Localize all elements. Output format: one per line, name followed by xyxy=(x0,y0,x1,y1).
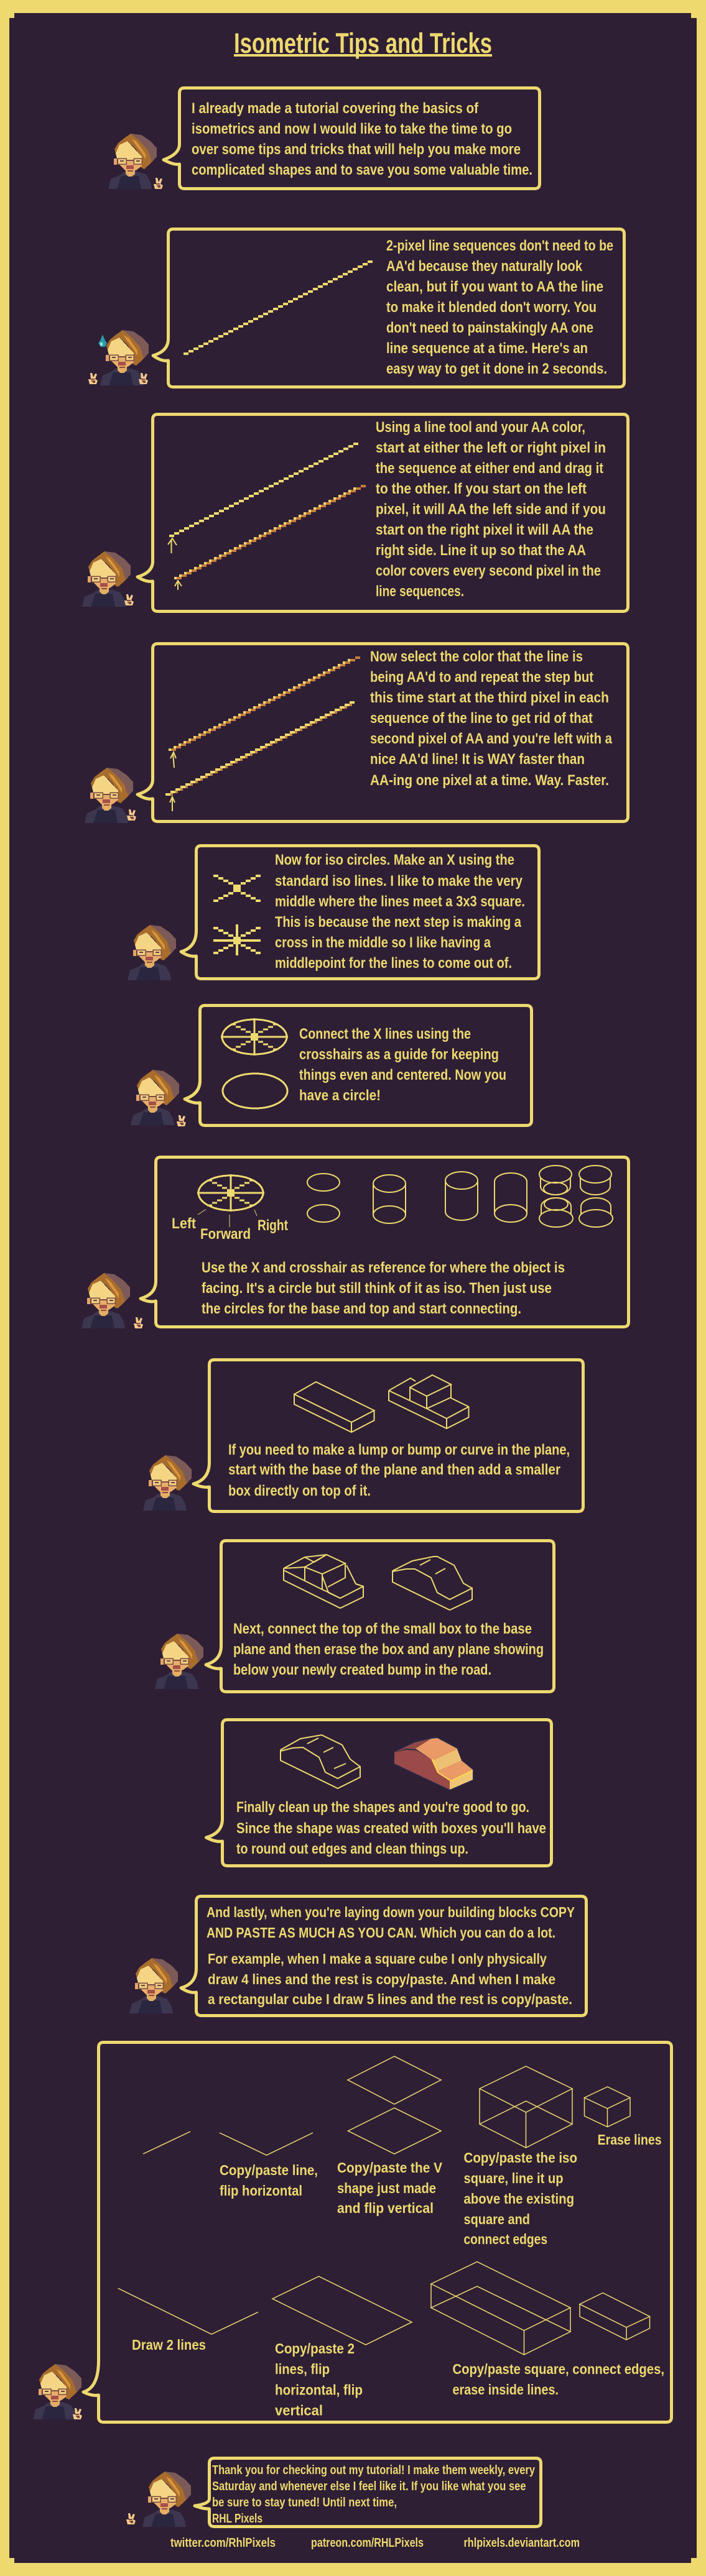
diagram: two diamonds with caption xyxy=(337,2056,443,2216)
panel: copy and paste xyxy=(129,1896,586,2015)
bump text xyxy=(228,1442,570,1499)
diagram: finished rectangular box xyxy=(580,2293,649,2340)
copy and paste text: And lastly, when you're laying down your building blocks COPY xyxy=(207,1904,575,1920)
diagram: parallelogram with caption: horizontal, flip xyxy=(275,2382,363,2398)
connect text xyxy=(299,1026,506,1104)
diagram: two long lines with caption: Draw 2 lines xyxy=(132,2337,206,2353)
thanks text: Saturday and whenever else I feel like it. If you like what you see xyxy=(212,2480,526,2493)
intro text: complicated shapes and to save you some valuable time. xyxy=(192,162,532,178)
AA instruction text xyxy=(376,419,606,600)
cylinders text: the circles for the base and top and start connecting. xyxy=(202,1300,521,1317)
clean up text: to round out edges and clean things up. xyxy=(236,1841,468,1857)
icon: short can with inner circle, top xyxy=(539,1166,572,1195)
panel: cube construction steps xyxy=(33,2043,672,2422)
iso circle text: middle where the lines meet a 3x3 square. xyxy=(275,893,525,910)
diagram: wire rectangular box with caption: erase inside lines. xyxy=(453,2381,559,2398)
line sequence text: to make it blended don't worry. You xyxy=(386,299,597,316)
icon: cylinder facing down xyxy=(495,1173,527,1222)
speech bubble: circle facing and cylinders xyxy=(141,1157,628,1327)
AA instruction text: to the other. If you start on the left xyxy=(376,481,587,497)
panel: closing thanks xyxy=(126,2458,541,2527)
title: Isometric Tips and Tricks xyxy=(234,27,492,59)
diagram: wire cube with caption: Copy/paste the iso xyxy=(464,2150,577,2166)
thanks text: be sure to stay tuned! Until next time, xyxy=(212,2496,397,2509)
icon: cylinder facing up xyxy=(445,1172,478,1220)
diagram: wire cube with caption: square and xyxy=(464,2211,530,2227)
speech bubble: clean up xyxy=(207,1719,551,1866)
intro text: over some tips and tricks that will help you make more xyxy=(192,141,521,158)
diagram: V shape with caption: Copy/paste line, xyxy=(220,2162,318,2178)
panel: introduction xyxy=(108,88,540,189)
footer links xyxy=(170,2536,580,2550)
connect text: Connect the X lines using the xyxy=(299,1026,471,1042)
speech bubble: connect the X lines xyxy=(185,1006,531,1125)
icon: shaded bump xyxy=(393,1737,474,1791)
connect text: have a circle! xyxy=(299,1087,381,1104)
diagram: finished small cube with caption xyxy=(585,2087,662,2148)
avatar: presenter with pointing hand xyxy=(33,2364,82,2419)
AA instruction text: the sequence at either end and drag it xyxy=(376,460,603,477)
line sequence text: line sequence at a time. Here's an xyxy=(386,340,588,357)
direction labels: Left xyxy=(172,1215,196,1232)
panel: connect small box to base xyxy=(155,1540,554,1692)
avatar: happy presenter xyxy=(85,768,136,823)
icon: finished iso circle xyxy=(223,1074,287,1108)
footer links: rhlpixels.deviantart.com xyxy=(464,2536,580,2550)
AA instruction text: start at either the left or right pixel in xyxy=(376,439,606,456)
direction labels: Forward xyxy=(200,1226,251,1243)
direction labels xyxy=(172,1210,288,1243)
connect box text xyxy=(233,1621,544,1678)
diagram: V shape with caption: flip horizontal xyxy=(220,2183,302,2199)
bump text: start with the base of the plane and then add a smaller xyxy=(228,1461,560,1478)
copy and paste text: a rectangular cube I draw 5 lines and the rest is copy/paste. xyxy=(208,1991,572,2007)
speech bubble: cube steps xyxy=(83,2043,672,2422)
icon: cleaned wireframe bump xyxy=(281,1735,360,1788)
iso circle text: middlepoint for the lines to come out of. xyxy=(275,955,512,972)
avatar: nervous presenter with sweat drop xyxy=(88,330,149,385)
iso circle text xyxy=(275,852,525,972)
panel: connect the X lines xyxy=(131,1006,531,1126)
copy and paste text: AND PASTE AS MUCH AS YOU CAN. Which you can do a lot. xyxy=(207,1925,555,1941)
panel: circle facing and cylinders xyxy=(81,1157,628,1328)
connect box text: Next, connect the top of the small box to the base xyxy=(233,1621,532,1637)
repeat step text: AA-ing one pixel at a time. Way. Faster. xyxy=(370,772,609,789)
icon: erased bump wireframe xyxy=(392,1557,472,1610)
line sequence text xyxy=(386,237,613,377)
avatar: presenter talking xyxy=(129,1958,178,2013)
iso circle text: Now for iso circles. Make an X using the xyxy=(275,852,514,868)
icon: short can, top xyxy=(579,1166,611,1195)
icon: two ellipses xyxy=(307,1174,340,1222)
line sequence text: 2-pixel line sequences don't need to be xyxy=(386,237,613,254)
speech bubble: repeat AA step xyxy=(137,644,628,822)
speech bubble: AA with line tool xyxy=(137,414,628,612)
line sequence text: AA'd because they naturally look xyxy=(386,258,583,275)
footer links: twitter.com/RhlPixels xyxy=(170,2536,276,2550)
pixel line example xyxy=(183,262,373,354)
diagram: parallelogram with caption: vertical xyxy=(275,2403,323,2419)
AA instruction text: start on the right pixel it will AA the xyxy=(376,522,593,538)
AA instruction text: pixel, it will AA the left side and if you xyxy=(376,501,606,518)
diagram: wire cube with caption xyxy=(464,2066,577,2247)
cylinders text xyxy=(202,1259,565,1317)
connect box text: below your newly created bump in the road. xyxy=(233,1662,491,1678)
speech bubble: iso circles X xyxy=(181,845,539,978)
avatar: presenter talking xyxy=(143,1455,192,1511)
avatar: presenter with eyes closed xyxy=(128,925,176,980)
AA instruction text: right side. Line it up so that the AA xyxy=(376,542,586,559)
icon: short can with inner circle, bottom xyxy=(539,1198,573,1227)
diagram: wire rectangular box with caption xyxy=(431,2261,664,2398)
bump text: If you need to make a lump or bump or curve in the plane, xyxy=(228,1442,570,1458)
cylinders text: Use the X and crosshair as reference for where the object is xyxy=(202,1259,565,1276)
avatar: smiling presenter xyxy=(108,134,163,189)
diagram: wire cube with caption: above the existing xyxy=(464,2191,574,2207)
connect box text: plane and then erase the box and any plane showing xyxy=(233,1641,544,1658)
thanks text: RHL Pixels xyxy=(212,2512,262,2526)
diagram: wire cube with caption: square, line it up xyxy=(464,2170,564,2186)
repeat step text xyxy=(370,648,613,789)
repeat step text: second pixel of AA and you're left with a xyxy=(370,730,613,747)
AA instruction text: color covers every second pixel in the xyxy=(376,563,601,579)
copy and paste text: draw 4 lines and the rest is copy/paste. And when I make xyxy=(208,1971,555,1987)
panel: clean up shapes xyxy=(207,1719,551,1866)
thanks text xyxy=(212,2463,536,2526)
icon: X with crosshair xyxy=(213,924,261,955)
intro text xyxy=(192,100,532,178)
icon: wire cylinder xyxy=(373,1175,406,1223)
panel: bump base box xyxy=(143,1360,583,1512)
connect text: things even and centered. Now you xyxy=(299,1067,506,1083)
diagram: parallelogram with caption xyxy=(272,2276,412,2419)
clean up text: Finally clean up the shapes and you're good to go. xyxy=(236,1799,529,1816)
clean up text xyxy=(236,1799,546,1857)
AA instruction text: Using a line tool and your AA color, xyxy=(376,419,585,436)
diagram: two diamonds with caption: and flip vertical xyxy=(337,2200,434,2216)
direction labels: Right xyxy=(258,1217,288,1234)
speech bubble: line sequences xyxy=(153,229,625,387)
diagram: wire cube with caption: connect edges xyxy=(464,2231,547,2247)
icon: X with centre square xyxy=(213,876,261,901)
AA instruction text: line sequences. xyxy=(376,583,464,600)
iso circle text: cross in the middle so I like having a xyxy=(275,934,491,951)
panel: 2-pixel line sequences xyxy=(88,229,625,387)
diagram: single line xyxy=(143,2132,190,2154)
diagram: V shape with caption xyxy=(220,2133,318,2199)
line sequence text: don't need to painstakingly AA one xyxy=(386,320,593,336)
repeat step text: being AA'd to and repeat the step but xyxy=(370,669,593,686)
line sequence text: clean, but if you want to AA the line xyxy=(386,278,603,295)
speech bubble: bump base box xyxy=(193,1360,583,1512)
panel: AA with line tool xyxy=(82,414,628,612)
diagram: parallelogram with caption: Copy/paste 2 xyxy=(275,2340,355,2357)
diagram: parallelogram with caption: lines, flip xyxy=(275,2361,330,2377)
footer links: patreon.com/RHLPixels xyxy=(311,2536,424,2550)
diagram: two long lines with caption xyxy=(118,2288,258,2353)
avatar: presenter with writing hand xyxy=(131,1070,186,1126)
intro text: I already made a tutorial covering the basics of xyxy=(192,100,479,117)
icon: flat box with smaller box on top xyxy=(389,1375,469,1428)
AA line with arrow xyxy=(169,658,360,768)
AA orange line with start arrow xyxy=(174,486,366,590)
copy and paste text: For example, when I make a square cube I only physically xyxy=(208,1951,547,1967)
repeat step text: this time start at the third pixel in each xyxy=(370,689,609,706)
speech bubble: closing thanks xyxy=(195,2458,541,2526)
icon: reference wheel xyxy=(197,1174,264,1212)
avatar: presenter talking xyxy=(155,1634,203,1689)
diagram: finished small cube with caption: Erase lines xyxy=(598,2132,662,2148)
icon: box with connecting lines xyxy=(284,1555,363,1608)
thanks text: Thank you for checking out my tutorial! I make them weekly, every xyxy=(212,2463,536,2477)
avatar: winking presenter xyxy=(81,1273,143,1328)
yellow line with start arrow xyxy=(168,444,358,553)
intro text: isometrics and now I would like to take the time to go xyxy=(192,121,512,137)
avatar: pointing presenter xyxy=(82,551,134,607)
line sequence text: easy way to get it done in 2 seconds. xyxy=(386,361,607,377)
iso circle text: standard iso lines. I like to make the very xyxy=(275,873,523,890)
speech bubble: connect small box xyxy=(206,1540,554,1692)
diagram: wire rectangular box with caption: Copy/paste square, connect edges, xyxy=(453,2361,664,2377)
repeat step text: nice AA'd line! It is WAY faster than xyxy=(370,751,585,768)
speech bubble: copy and paste xyxy=(181,1896,586,2015)
icon: short can, bottom xyxy=(579,1198,613,1227)
avatar: presenter waving xyxy=(126,2472,191,2527)
repeat step text: sequence of the line to get rid of that xyxy=(370,710,593,727)
clean up text: Since the shape was created with boxes you'll have xyxy=(236,1820,546,1837)
cylinders text: facing. It's a circle but still think of it as iso. Then just use xyxy=(202,1280,552,1297)
icon: flat box xyxy=(294,1382,374,1432)
panel: iso circles X xyxy=(128,845,539,980)
speech bubble: introduction xyxy=(164,88,540,189)
iso circle text: This is because the next step is making a xyxy=(275,914,522,931)
copy and paste text xyxy=(207,1904,575,2007)
panel: repeat AA step xyxy=(85,644,628,823)
diagram: two diamonds with caption: shape just made xyxy=(337,2180,436,2196)
repeat step text: Now select the color that the line is xyxy=(370,648,583,665)
icon: circle with crosshair xyxy=(221,1018,288,1056)
bump text: box directly on top of it. xyxy=(228,1483,371,1499)
finished AA line with arrow xyxy=(165,702,355,811)
connect text: crosshairs as a guide for keeping xyxy=(299,1046,499,1063)
diagram: two diamonds with caption: Copy/paste the V xyxy=(337,2160,443,2176)
